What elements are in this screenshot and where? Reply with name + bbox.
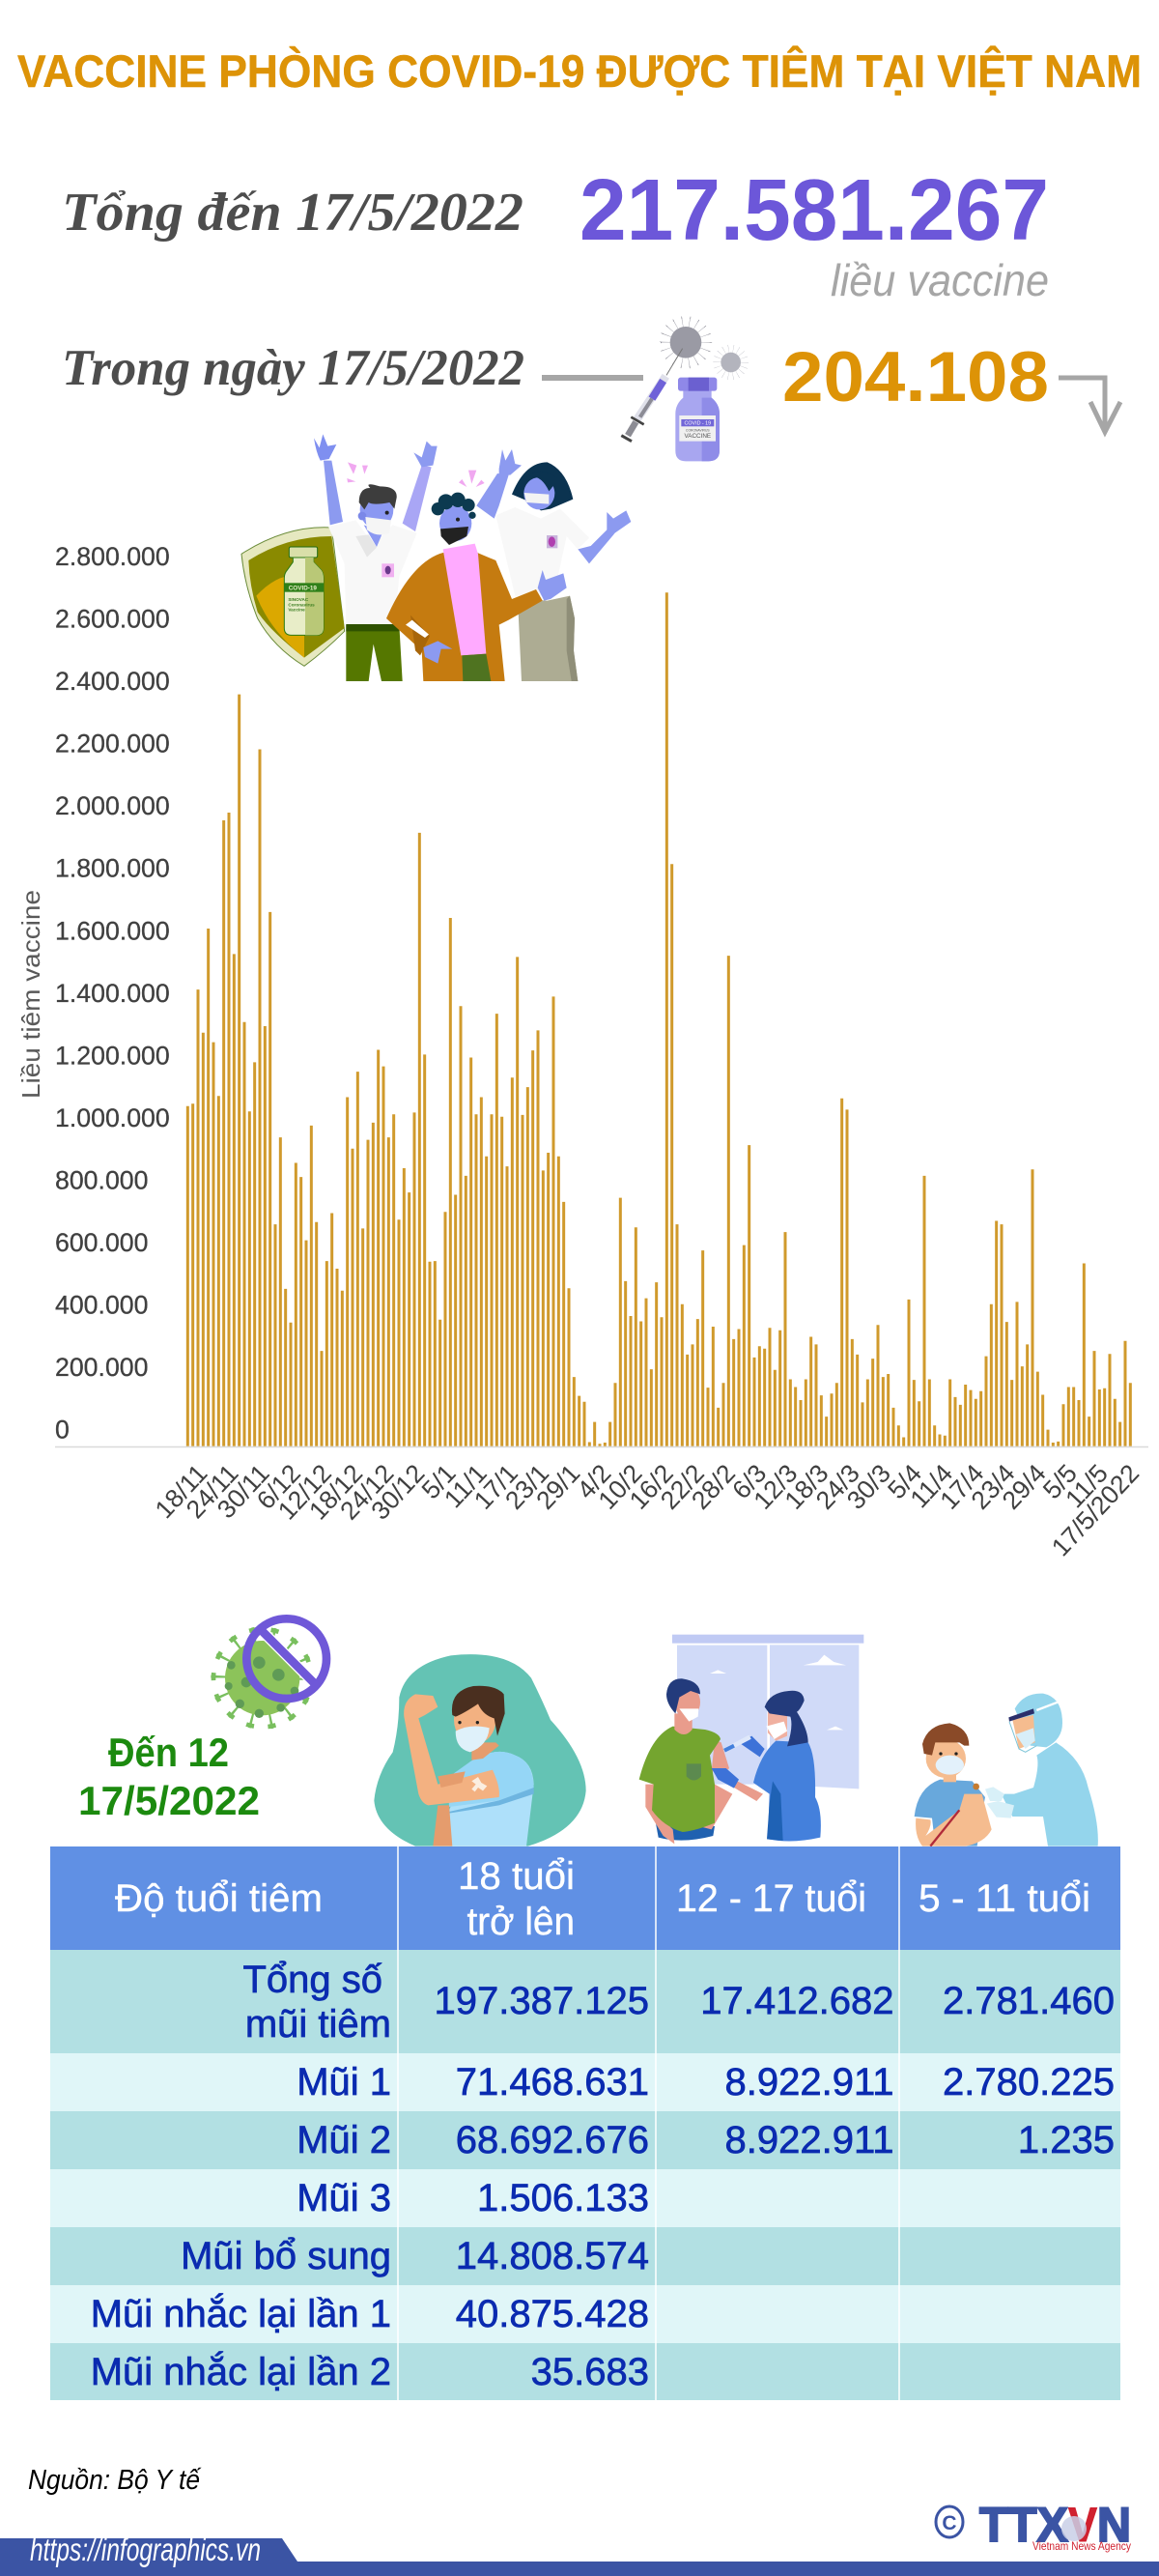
row: dose 3 (297, 2177, 649, 2219)
row: dose 1: 71.468.631 (456, 2061, 649, 2104)
row: total doses: mũi tiêm (245, 2003, 391, 2046)
x axis date labels: 5/1 (416, 1459, 462, 1504)
y axis labels: 800.000 (55, 1165, 148, 1194)
y axis labels: 1.200.000 (55, 1041, 170, 1070)
daily label: Trong ngày 17/5/2022 (62, 340, 524, 396)
TTXVN logo: Vietnam News Agency (1032, 2539, 1131, 2553)
person: centre man in orange coat (386, 493, 567, 681)
row: additional dose (181, 2235, 649, 2277)
x axis date labels: 11/1 (438, 1459, 493, 1513)
TTXVN logo: N (1097, 2498, 1131, 2552)
y axis labels (55, 542, 170, 1445)
y axis labels: 1.000.000 (55, 1103, 170, 1132)
x axis date labels (150, 1459, 1145, 1561)
footer band: https://infographics.vn (30, 2532, 261, 2567)
x axis date labels: 5/5 (1037, 1459, 1083, 1504)
person: left man (314, 434, 438, 681)
row: total doses: 2.781.460 (943, 1980, 1115, 2022)
table header: 5 - 11 tuổi (919, 1877, 1090, 1920)
row: booster 1: 40.875.428 (456, 2293, 649, 2335)
x axis date labels: 17/4 (934, 1459, 989, 1515)
date heading: Đến 12 (108, 1730, 229, 1775)
footer band (0, 2532, 1159, 2576)
x axis date labels: 29/4 (997, 1459, 1052, 1515)
y axis labels: 1.400.000 (55, 979, 170, 1008)
x axis date labels: 11/5 (1060, 1459, 1114, 1513)
x axis date labels: 30/11 (212, 1459, 275, 1524)
row: dose 2: 68.692.676 (456, 2119, 649, 2161)
unit: doses: liều vaccine (831, 255, 1049, 305)
x axis date labels: 16/2 (624, 1459, 679, 1515)
x axis date labels: 6/12 (251, 1459, 306, 1515)
x axis date labels: 11/4 (904, 1459, 958, 1513)
y axis labels: 400.000 (55, 1291, 148, 1320)
person: child (915, 1723, 992, 1846)
x axis date labels: 10/2 (592, 1459, 648, 1515)
y axis labels: 1.600.000 (55, 916, 170, 945)
x axis date labels: 30/3 (841, 1459, 896, 1515)
sparkles (347, 462, 485, 487)
icon: syringe, vial and viruses: VACCINE (684, 433, 711, 440)
row: dose 1: Mũi 1 (297, 2061, 391, 2104)
TTXVN logo (936, 2498, 1131, 2553)
x axis date labels: 6/3 (726, 1459, 772, 1504)
bar chart: daily doses (55, 592, 1148, 1447)
x axis date labels: 18/11 (150, 1459, 212, 1524)
row: additional dose: 14.808.574 (456, 2235, 649, 2277)
row: total doses (242, 1959, 1115, 2046)
date heading: 17/5/2022 (78, 1778, 260, 1823)
icon: shield with vaccine vial: Vaccine (288, 608, 305, 613)
table row backgrounds (50, 1846, 1120, 2400)
x axis date labels: 22/2 (655, 1459, 710, 1515)
x axis date labels: 24/3 (810, 1459, 865, 1515)
x axis date labels: 23/1 (499, 1459, 554, 1515)
icon: syringe, vial and viruses: CORONAVIRUS (686, 429, 710, 433)
table header: trở lên (467, 1901, 575, 1943)
y axis labels: 600.000 (55, 1228, 148, 1257)
row: dose 1: 2.780.225 (943, 2061, 1115, 2104)
y axis labels: 2.600.000 (55, 605, 170, 634)
x axis date labels: 30/12 (365, 1459, 430, 1526)
person: medical worker in protective suit (985, 1694, 1098, 1846)
row: dose 1: 8.922.911 (725, 2061, 894, 2104)
date heading (78, 1730, 260, 1823)
row: booster 2 (91, 2350, 649, 2393)
arrow: down (1059, 378, 1120, 432)
row: booster 1: Mũi nhắc lại lần 1 (91, 2292, 391, 2335)
x axis date labels: 17/5/2022 (1046, 1459, 1145, 1561)
row: total doses: 197.387.125 (435, 1980, 649, 2022)
x axis date labels: 12/3 (748, 1459, 803, 1515)
y axis labels: 1.800.000 (55, 854, 170, 883)
x axis date labels: 18/3 (778, 1459, 834, 1515)
table header (50, 1846, 1120, 1950)
person: teenager (639, 1678, 732, 1844)
row: booster 2: 35.683 (531, 2351, 649, 2393)
vaccination table (50, 1846, 1120, 2400)
x axis date labels: 28/2 (686, 1459, 741, 1515)
row: dose 1 (297, 2061, 1115, 2104)
row: booster 2: Mũi nhắc lại lần 2 (91, 2350, 391, 2393)
total label: Tổng đến 17/5/2022 (62, 183, 523, 243)
icon: syringe, vial and viruses: COVID - 19 (685, 421, 711, 427)
y axis labels: 2.000.000 (55, 791, 170, 820)
row: total doses: 17.412.682 (700, 1980, 894, 2022)
table header: 12 - 17 tuổi (676, 1877, 866, 1920)
icon: shield with vaccine vial: SINOVAC (288, 597, 309, 602)
source note: Nguồn: Bộ Y tế (28, 2465, 202, 2496)
x axis date labels: 17/1 (468, 1459, 523, 1515)
x axis date labels: 24/12 (334, 1459, 399, 1526)
y axis labels: 2.400.000 (55, 667, 170, 696)
total number: 217.581.267 (580, 162, 1049, 259)
y axis labels: 0 (55, 1416, 70, 1445)
row: dose 3: 1.506.133 (477, 2177, 649, 2219)
y axis title: Liều tiêm vaccine (16, 890, 45, 1099)
row: total doses: Tổng số (242, 1959, 382, 2001)
x axis date labels: 24/11 (181, 1459, 244, 1524)
y axis labels: 2.800.000 (55, 542, 170, 571)
illustration: teen being vaccinated by nurse (639, 1635, 1098, 1846)
person: nurse (712, 1691, 821, 1841)
TTXVN logo: C (942, 2512, 957, 2534)
row: dose 2 (297, 2119, 1115, 2161)
illustration: man flexing arm (374, 1654, 586, 1846)
x axis date labels: 18/12 (303, 1459, 368, 1526)
person: woman (476, 449, 631, 681)
y axis labels: 200.000 (55, 1353, 148, 1382)
row: dose 2: 1.235 (1018, 2119, 1115, 2161)
icon: crossed-out coronavirus (213, 1618, 326, 1727)
window (672, 1635, 863, 1789)
x axis date labels: 5/4 (882, 1459, 927, 1504)
row: dose 2: Mũi 2 (297, 2119, 391, 2161)
illustration: vaccinated people with shield (241, 434, 631, 681)
TTXVN logo: V (1068, 2498, 1098, 2552)
row: booster 1 (91, 2292, 649, 2335)
icon: shield with vaccine vial (241, 528, 345, 666)
row: additional dose: Mũi bổ sung (181, 2235, 391, 2277)
icon: shield with vaccine vial: COVID-19 (289, 586, 317, 592)
row: dose 2: 8.922.911 (725, 2119, 894, 2161)
TTXVN logo: TTX (979, 2498, 1068, 2552)
table header: Độ tuổi tiêm (115, 1877, 323, 1920)
connector line (542, 375, 643, 381)
x axis date labels: 23/4 (965, 1459, 1021, 1515)
icon: shield with vaccine vial: Coronavirus (288, 602, 315, 607)
y axis labels: 2.200.000 (55, 730, 170, 758)
icon: syringe, vial and viruses (621, 317, 745, 461)
daily number: 204.108 (782, 338, 1049, 416)
x axis date labels: 29/1 (530, 1459, 585, 1515)
table header: 18 tuổi (458, 1855, 575, 1898)
x axis date labels: 4/2 (571, 1459, 616, 1504)
x axis date labels: 12/12 (272, 1459, 337, 1526)
row: dose 3: Mũi 3 (297, 2177, 391, 2219)
